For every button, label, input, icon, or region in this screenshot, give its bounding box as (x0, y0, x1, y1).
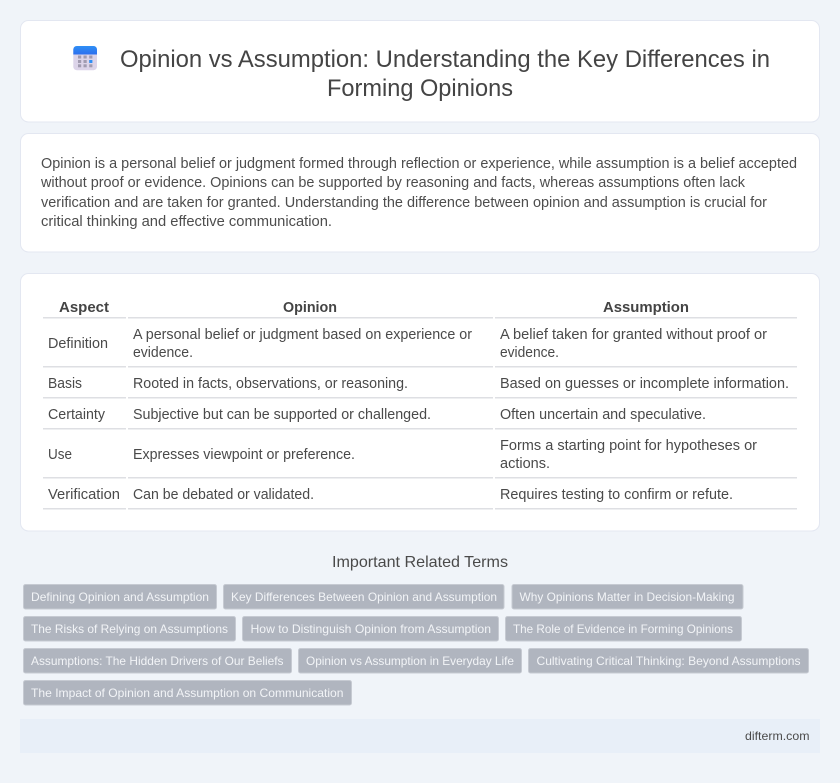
tag: Cultivating Critical Thinking: Beyond Assumptions (536, 654, 800, 668)
footer (20, 719, 820, 753)
tag (24, 584, 216, 609)
table header row: Assumption (603, 300, 689, 316)
table header row (59, 300, 689, 316)
tag: Opinion vs Assumption in Everyday Life (306, 654, 514, 668)
table row: basis (48, 376, 789, 392)
table row: use: Use (48, 447, 72, 463)
tag (512, 584, 743, 609)
tag (506, 616, 742, 641)
table row: certainty: Subjective but can be supported or challenged. (133, 407, 431, 423)
table row: verification: Requires testing to confirm or refute. (500, 487, 733, 503)
icon: calendar (73, 46, 97, 70)
table row: verification (48, 487, 733, 503)
panel: comparison table (20, 274, 820, 531)
tag: How to Distinguish Opinion from Assumption (250, 622, 491, 636)
title (120, 46, 770, 102)
tag (242, 616, 498, 641)
table row: definition: A personal belief or judgment based on experience or (133, 327, 472, 343)
tag (224, 584, 504, 609)
title: Opinion vs Assumption: Understanding the Key Differences in (120, 46, 770, 73)
table row: use: Expresses viewpoint or preference. (133, 447, 355, 463)
tag (24, 680, 352, 705)
tag: Why Opinions Matter in Decision-Making (520, 590, 734, 604)
panel: title header (20, 20, 820, 122)
footer: difterm.com (745, 729, 810, 743)
table row: use (48, 438, 757, 472)
text block: definition paragraph: Opinion is a personal belief or judgment formed through reflection or experience, while assumption is a belief accepted (41, 156, 797, 172)
text block: definition paragraph (40, 156, 797, 230)
tag (298, 648, 522, 673)
table header row: Opinion (283, 300, 337, 316)
tag: Assumptions: The Hidden Drivers of Our Beliefs (31, 654, 284, 668)
table row: definition: Definition (48, 336, 108, 352)
title: Forming Opinions (327, 75, 513, 102)
tag: The Impact of Opinion and Assumption on Communication (31, 686, 344, 700)
table header row: Aspect (59, 300, 109, 316)
table row: definition: evidence. (500, 345, 559, 361)
tag (528, 648, 808, 673)
panel: intro paragraph (20, 134, 820, 252)
table row: use: Forms a starting point for hypotheses or (500, 438, 757, 454)
related term tags (24, 584, 808, 705)
table row: certainty: Certainty (48, 407, 106, 423)
tag: The Role of Evidence in Forming Opinions (513, 622, 733, 636)
text block: definition paragraph: critical thinking and effective communication. (41, 214, 332, 230)
text block: definition paragraph: without proof or evidence. Opinions can be supported by reasoning and facts, whereas assumptions often lack (40, 175, 746, 191)
heading: important related terms: Important Related Terms (332, 554, 508, 571)
tag: Key Differences Between Opinion and Assumption (231, 590, 497, 604)
tag: The Risks of Relying on Assumptions (31, 622, 228, 636)
table row: certainty: Often uncertain and speculative. (500, 407, 706, 423)
text block: definition paragraph: verification and are taken for granted. Understanding the difference between opinion and assumption is crucial for (41, 195, 767, 211)
table row: basis: Based on guesses or incomplete information. (500, 376, 789, 392)
tag (24, 648, 292, 673)
table row: verification: Can be debated or validated. (133, 487, 314, 503)
table row: definition: evidence. (133, 345, 193, 361)
table row: definition: A belief taken for granted without proof or (500, 327, 767, 343)
table row: verification: Verification (48, 487, 120, 503)
tag: Defining Opinion and Assumption (31, 590, 209, 604)
table row: definition (48, 327, 767, 361)
table row: certainty (48, 407, 706, 423)
table row: basis: Basis (48, 376, 82, 392)
table row: use: actions. (500, 456, 550, 472)
table row: basis: Rooted in facts, observations, or reasoning. (133, 376, 408, 392)
tag (24, 616, 236, 641)
